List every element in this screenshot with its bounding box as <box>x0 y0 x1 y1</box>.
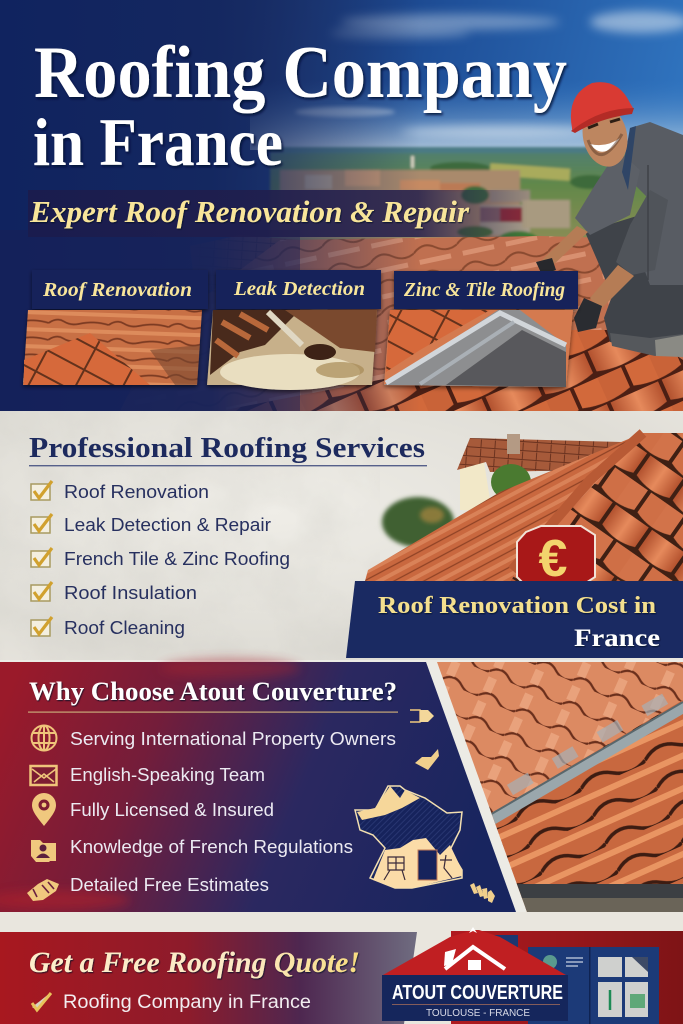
cost banner: France <box>574 625 660 652</box>
euro badge <box>517 526 595 590</box>
worker photo <box>536 82 683 357</box>
icon: globe <box>32 725 56 751</box>
benefit list <box>70 729 396 895</box>
subtitle: Expert Roof Renovation & Repair <box>29 194 470 229</box>
panel: professional roofing services <box>0 411 683 662</box>
checklist: Roof Cleaning <box>64 618 185 638</box>
card: zinc and tile roofing: Zinc & Tile Roofing <box>403 279 565 301</box>
card: leak detection <box>207 270 381 390</box>
checklist: French Tile & Zinc Roofing <box>64 549 290 569</box>
benefit list: Knowledge of French Regulations <box>70 837 353 857</box>
euro badge: € <box>539 530 567 588</box>
checklist: Roof Insulation <box>64 583 197 603</box>
checklist: Roof Renovation <box>64 482 209 502</box>
benefit list: Fully Licensed & Insured <box>70 800 274 820</box>
icon: pencil <box>415 749 439 770</box>
benefit list: English-Speaking Team <box>70 765 265 785</box>
card: roof renovation: Roof Renovation <box>42 279 192 301</box>
title: in France <box>33 104 283 180</box>
house and roof photo <box>365 433 683 590</box>
icon: arrow dashes <box>470 883 495 903</box>
benefit list: Serving International Property Owners <box>70 729 396 749</box>
heading: Why Choose Atout Couverture? <box>29 677 397 706</box>
panel: free quote footer <box>0 912 683 1024</box>
heading: Get a Free Roofing Quote! <box>29 946 360 979</box>
benefit list: Detailed Free Estimates <box>70 875 269 895</box>
card: roof renovation <box>23 270 208 385</box>
panel: hero banner <box>0 0 683 411</box>
title: Roofing Company <box>34 32 567 114</box>
icon: person badge <box>31 840 56 862</box>
panel: why choose atout couverture <box>0 658 683 914</box>
icon: envelope <box>30 766 56 785</box>
clouds <box>295 11 683 138</box>
logo: atout couverture <box>382 927 568 1021</box>
jacket <box>625 122 683 285</box>
landscape <box>270 146 646 240</box>
logo: atout couverture: ATOUT COUVERTURE <box>392 982 563 1004</box>
icon: arrow tag <box>410 710 434 722</box>
cost banner: Roof Renovation Cost in <box>378 593 656 619</box>
subtitle band <box>28 190 528 237</box>
call to action text: Roofing Company in France <box>63 992 311 1013</box>
checklist <box>31 481 290 638</box>
icon: map pin <box>32 793 56 826</box>
card: leak detection: Leak Detection <box>233 278 365 300</box>
logo: atout couverture: TOULOUSE - FRANCE <box>426 1008 530 1019</box>
title <box>34 44 570 169</box>
icon: france map house <box>355 786 462 888</box>
card: zinc and tile roofing <box>384 271 578 387</box>
cost banner <box>346 581 683 658</box>
heading: Professional Roofing Services <box>29 433 425 464</box>
roof photo <box>430 662 683 912</box>
icon: tick <box>32 993 51 1011</box>
icon: handshake <box>27 879 59 901</box>
checklist: Leak Detection & Repair <box>64 515 271 535</box>
blue windows panel <box>487 935 659 1024</box>
background roofs <box>212 236 683 411</box>
